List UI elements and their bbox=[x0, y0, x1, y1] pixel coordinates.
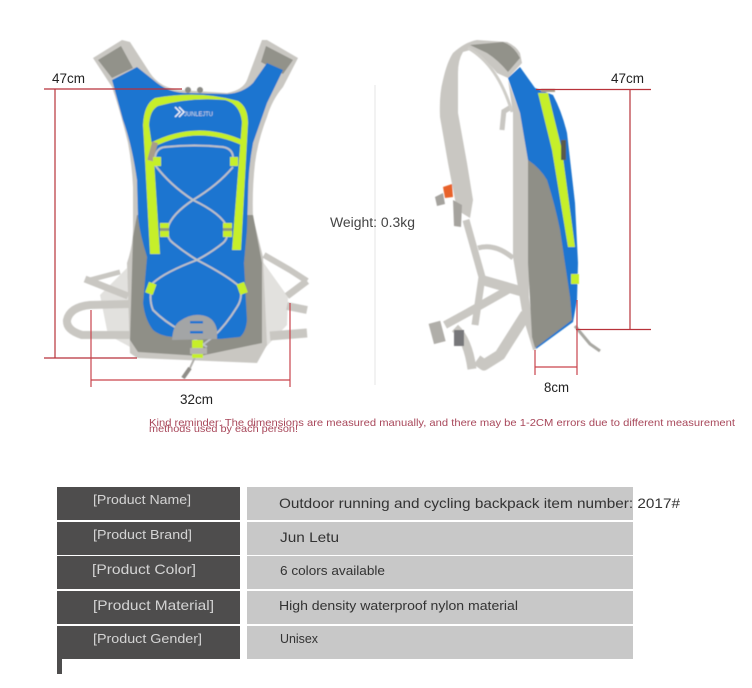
table corner remnant bbox=[57, 659, 62, 674]
front height dimension 47cm: 47cm bbox=[52, 71, 85, 86]
row: product color bbox=[57, 556, 633, 589]
side view backpack illustration bbox=[429, 40, 600, 369]
back panel bbox=[508, 80, 536, 350]
neon zipper bbox=[538, 93, 575, 247]
row: product name bbox=[57, 487, 680, 520]
waist buckle bbox=[429, 321, 446, 344]
lower grey panel bbox=[130, 215, 262, 356]
tail cord bbox=[575, 326, 600, 351]
grey chest buckle bbox=[435, 193, 462, 227]
outer grey shell bbox=[93, 40, 298, 363]
row: product material: High density waterproof nylon material bbox=[279, 599, 518, 613]
row: product name: [Product Name] bbox=[93, 492, 191, 507]
cord loops bbox=[145, 157, 248, 295]
bungee cord bbox=[150, 146, 241, 347]
row: product gender: Unisex bbox=[280, 632, 319, 646]
kind reminder note: methods used by each person! bbox=[149, 423, 298, 435]
blue side body bbox=[508, 67, 578, 349]
product spec table bbox=[57, 487, 680, 659]
lower straps bbox=[445, 107, 527, 369]
front view backpack illustration bbox=[67, 40, 307, 378]
row: product material: [Product Material] bbox=[93, 597, 214, 613]
weight label: Weight: 0.3kg bbox=[330, 215, 415, 230]
row: product brand: [Product Brand] bbox=[93, 527, 192, 542]
zipper pull bbox=[147, 141, 158, 161]
top zipper pulls bbox=[185, 87, 203, 93]
side height dimension 47cm: 47cm bbox=[611, 71, 644, 86]
grey side panel bbox=[528, 160, 572, 348]
front width dimension 32cm bbox=[91, 303, 290, 407]
mesh side panels bbox=[100, 268, 132, 348]
orange buckle bbox=[443, 184, 453, 198]
bottom reinforcement plate bbox=[172, 315, 217, 340]
shoulder pad bbox=[470, 42, 520, 72]
side depth dimension 8cm: 8cm bbox=[544, 380, 569, 395]
row: product gender bbox=[57, 626, 633, 659]
top zipper pulls bbox=[541, 89, 555, 92]
neon front pocket trim bbox=[152, 133, 243, 145]
brand logo bbox=[175, 107, 213, 118]
front height dimension 47cm bbox=[44, 71, 182, 358]
drawcord toggle bbox=[183, 340, 207, 378]
side height dimension 47cm bbox=[536, 71, 651, 330]
row: product color: 6 colors available bbox=[280, 564, 385, 578]
row: product brand: Jun Letu bbox=[280, 529, 339, 545]
kind reminder note bbox=[149, 417, 735, 435]
row: product gender: [Product Gender] bbox=[93, 631, 202, 646]
inner arc band bbox=[468, 48, 512, 112]
shoulder strap bbox=[440, 40, 522, 218]
side wing straps bbox=[67, 255, 307, 336]
front width dimension 32cm: 32cm bbox=[180, 392, 213, 407]
side depth dimension 8cm bbox=[535, 300, 577, 395]
blue body bbox=[112, 63, 283, 339]
neon zipper trim bbox=[143, 95, 248, 254]
shoulder pads bbox=[98, 46, 133, 78]
kind reminder note: Kind reminder: The dimensions are measured manually, and there may be 1-2CM errors due to different measurement bbox=[149, 417, 735, 429]
row: product material bbox=[57, 591, 633, 624]
row: product brand bbox=[57, 522, 633, 555]
cord loops bbox=[571, 274, 579, 284]
row: product color: [Product Color] bbox=[92, 561, 196, 577]
row: product name: Outdoor running and cycling backpack item number: 2017# bbox=[279, 495, 680, 511]
brand logo: JUNLEJTU bbox=[184, 111, 213, 118]
